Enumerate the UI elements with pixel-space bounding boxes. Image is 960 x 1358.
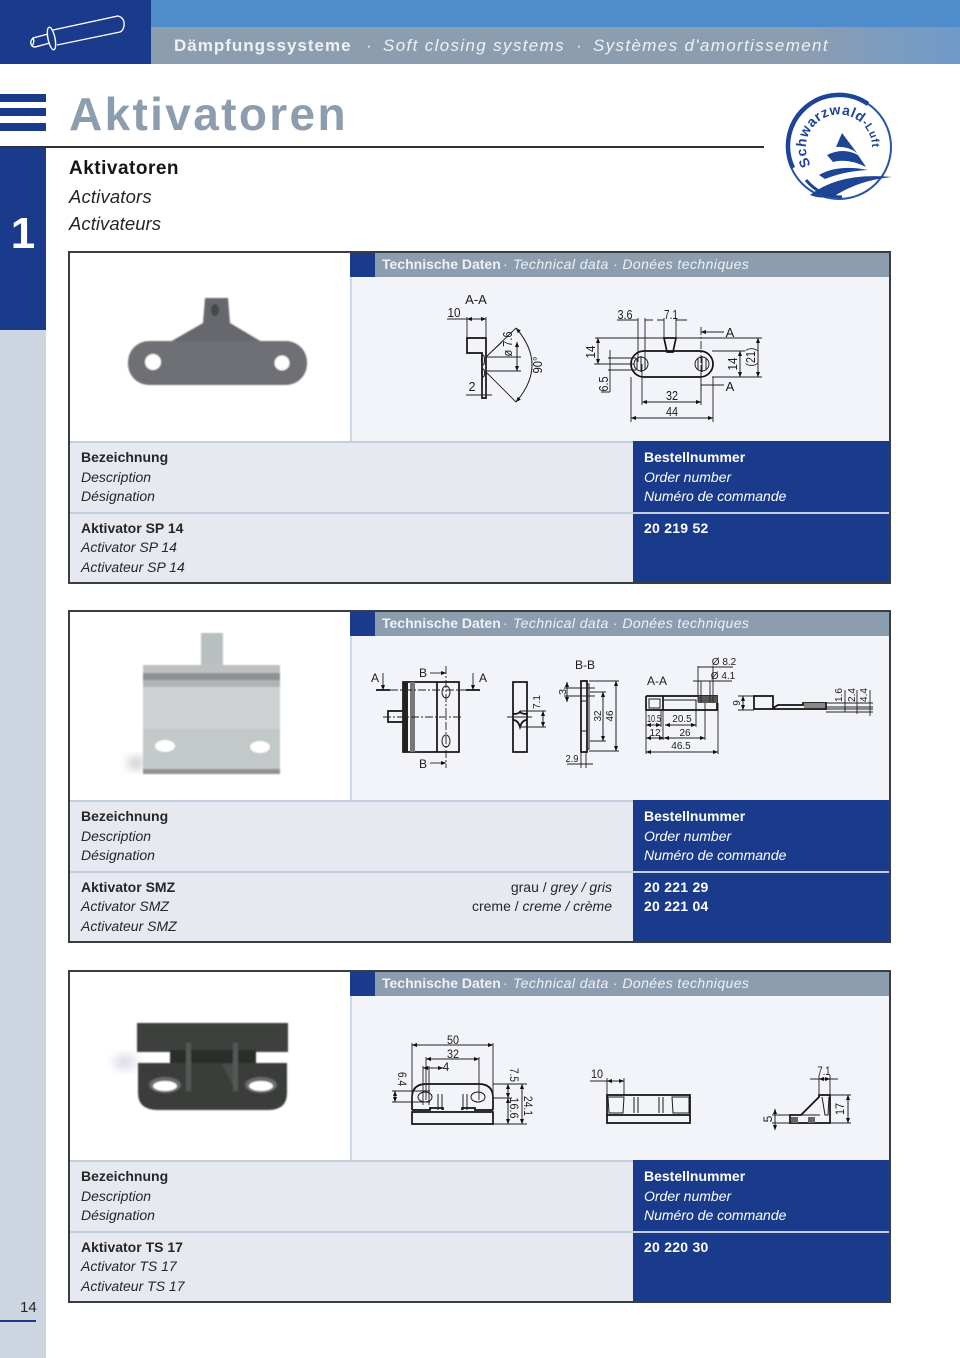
table row divider (70, 800, 889, 802)
technical drawing: SMZ: 20.5 (672, 714, 692, 725)
technical drawing: SP 14: 32 (666, 388, 678, 403)
bar accent (350, 972, 375, 996)
header title English: Soft closing systems (383, 36, 565, 55)
technical drawing: SMZ: B-B (575, 658, 595, 672)
table row divider (70, 1160, 889, 1162)
technical drawing: SMZ: 12 (649, 728, 661, 739)
order number column (633, 441, 889, 582)
header title French: Systèmes d'amortissement (593, 36, 829, 55)
logo: Schwarzwald-Luft (786, 92, 892, 200)
description header: Désignation (81, 847, 155, 863)
technical drawing: SP 14: 10 (448, 305, 460, 320)
order header (644, 449, 786, 504)
technical drawing: SMZ: 9 (732, 700, 743, 706)
order header: Numéro de commande (644, 1207, 786, 1223)
technical drawing: SMZ: 2.9 (566, 754, 579, 765)
technical drawing: SP 14: 7.1 (664, 307, 678, 322)
technical drawing: SMZ: A-A (647, 674, 667, 688)
product name: Activateur SMZ (81, 918, 177, 934)
table row divider (70, 1231, 889, 1233)
technical data label: Technische Daten (382, 975, 501, 991)
technical data label: · (503, 615, 508, 631)
product photo: SP 14 (127, 297, 308, 386)
order header: Bestellnummer (644, 449, 745, 465)
technical data bar (350, 612, 889, 636)
technical drawing: SP 14: (21) (743, 348, 758, 366)
product name: Activateur TS 17 (81, 1278, 184, 1294)
heading English: Activators (69, 186, 152, 207)
technical drawing: TS 17: 7.5 (507, 1068, 521, 1082)
technical drawing: SMZ: 7.1 (532, 695, 543, 709)
table: description and order number (70, 1160, 889, 1301)
order values: 20 221 04 (644, 898, 709, 914)
technical drawing: SP 14: 14 (583, 346, 598, 358)
technical drawing: SMZ: 4.4 (859, 688, 870, 702)
bar accent (350, 612, 375, 636)
technical drawing: SMZ: 26 (679, 728, 691, 739)
technical drawing: SMZ: A (479, 671, 487, 685)
technical drawing: TS 17: 17 (833, 1103, 847, 1115)
technical drawing: TS 17: 16.6 (507, 1098, 521, 1119)
product name: Aktivator SP 14 (81, 520, 183, 536)
table: description and order number (70, 441, 889, 582)
header separator: · (576, 36, 583, 55)
technical drawing: SMZ (350, 636, 889, 800)
table: description and order number (70, 800, 889, 941)
technical drawing: TS 17: 24.1 (521, 1096, 535, 1116)
order header (644, 1168, 786, 1223)
order column divider (633, 1231, 889, 1233)
icon: damper cylinder (30, 15, 125, 50)
product name (80, 879, 178, 934)
technical data label: Technical data · Donées techniques (513, 615, 749, 631)
technical data bar (350, 972, 889, 996)
technical drawing: SMZ: 1.6 (834, 688, 845, 702)
order value: 20 219 52 (644, 520, 709, 536)
technical data bar (350, 253, 889, 277)
technical data label: Technische Daten (382, 615, 501, 631)
table row divider (70, 441, 889, 443)
description header: Description (81, 828, 151, 844)
technical drawing: SMZ: 2.4 (847, 688, 858, 702)
technical drawing: SMZ: Ø 4.1 (711, 671, 736, 682)
order value: 20 220 30 (644, 1239, 709, 1255)
technical drawing: SMZ: B (419, 666, 427, 680)
technical drawing: SMZ: B (419, 757, 427, 771)
technical data label (382, 615, 749, 631)
technical drawing: SMZ: A (371, 671, 379, 685)
technical drawing: TS 17: 6.4 (395, 1072, 409, 1086)
technical drawing: SP 14 (350, 277, 889, 441)
order values: 20 221 29 (644, 879, 709, 895)
product name: Activator SMZ (81, 898, 169, 914)
product name: Activator SP 14 (81, 539, 177, 555)
bar accent (350, 253, 375, 277)
technical drawing: SP 14: 44 (666, 404, 678, 419)
technical drawing: SMZ: 46.5 (671, 741, 691, 752)
colour options (472, 879, 612, 914)
technical drawing: SP 14: ø 7.6 (500, 332, 515, 356)
heading French: Activateurs (69, 213, 161, 234)
header title band (151, 27, 960, 64)
technical drawing: TS 17: 50 (447, 1033, 459, 1047)
table row divider (70, 871, 889, 873)
logo: Schwarzwald-Luft: Schwarzwald-Luft (796, 106, 880, 168)
technical drawing: SP 14: 90° (530, 356, 545, 374)
description header: Désignation (81, 1207, 155, 1223)
section heading (68, 158, 179, 234)
order header: Order number (644, 1188, 731, 1204)
order header: Bestellnummer (644, 1168, 745, 1184)
page number: 14 (20, 1299, 37, 1316)
heading German: Aktivatoren (69, 158, 179, 179)
technical drawing: SP 14: A-A (465, 292, 487, 307)
description header (81, 449, 168, 504)
technical drawing: TS 17: 4 (443, 1060, 450, 1074)
main title: Aktivatoren (69, 88, 348, 140)
technical drawing: TS 17: 32 (447, 1047, 459, 1061)
header top blue band (151, 0, 960, 27)
product name: Aktivator SMZ (81, 879, 175, 895)
technical drawing: SP 14: 14 (725, 358, 740, 370)
technical drawing: SP 14: A (726, 325, 735, 340)
technical drawing: TS 17: 5 (761, 1115, 775, 1122)
product name: Activateur SP 14 (81, 559, 185, 575)
colour options: creme / creme / crème (472, 898, 612, 914)
chapter number: 1 (11, 209, 35, 258)
product name (80, 1239, 185, 1294)
sidebar lower band (0, 330, 46, 1358)
technical drawing: SMZ: 3 (558, 689, 569, 695)
description header: Bezeichnung (81, 808, 168, 824)
technical drawing: TS 17 (350, 996, 889, 1160)
header icon block (0, 0, 151, 64)
description header (81, 808, 168, 863)
order values (644, 879, 709, 914)
description header: Bezeichnung (81, 449, 168, 465)
panel: Aktivator TS 17 (68, 970, 891, 1303)
description header: Désignation (81, 488, 155, 504)
technical drawing: TS 17: 7.1 (818, 1064, 831, 1078)
order header (644, 808, 786, 863)
technical drawing: SP 14: 6.5 (596, 376, 611, 392)
technical data label: · (503, 256, 508, 272)
product name: Activator TS 17 (81, 1258, 177, 1274)
table row divider (70, 512, 889, 514)
description header: Description (81, 469, 151, 485)
technical data label (382, 256, 749, 272)
technical data label: Technical data · Donées techniques (513, 256, 749, 272)
sidebar chapter stripes (0, 94, 46, 131)
technical drawing: SMZ: 10.5 (647, 714, 661, 725)
order column divider (633, 871, 889, 873)
sidebar chapter block (0, 148, 46, 330)
page number rule (0, 1320, 36, 1322)
technical drawing: TS 17: 10 (591, 1067, 603, 1081)
colour options: grau / grey / gris (511, 879, 612, 895)
technical data label (382, 975, 749, 991)
header separator: · (366, 36, 373, 55)
header title German: Dämpfungssysteme (174, 36, 352, 55)
technical data label: Technical data · Donées techniques (513, 975, 749, 991)
technical drawing: SP 14: 2 (468, 379, 476, 394)
order header: Order number (644, 469, 731, 485)
product name: Aktivator TS 17 (81, 1239, 183, 1255)
panel: Aktivator SP 14 (68, 251, 891, 584)
order number column (633, 1160, 889, 1301)
panel: Aktivator SMZ (68, 610, 891, 943)
technical drawing: SMZ: Ø 8.2 (712, 657, 737, 668)
technical data label: Technische Daten (382, 256, 501, 272)
technical drawing: SMZ: 32 (593, 710, 604, 722)
order header: Bestellnummer (644, 808, 745, 824)
product photo: SMZ (124, 632, 281, 775)
title rule (0, 146, 764, 148)
description header: Description (81, 1188, 151, 1204)
technical drawing: SP 14: A (726, 379, 735, 394)
product name (80, 520, 185, 575)
technical drawing: SMZ: 46 (605, 710, 616, 722)
description header: Bezeichnung (81, 1168, 168, 1184)
order number column (633, 800, 889, 941)
description header (81, 1168, 168, 1223)
technical drawing: SP 14: 3.6 (618, 307, 632, 322)
order header: Order number (644, 828, 731, 844)
order column divider (633, 512, 889, 514)
technical data label: · (503, 975, 508, 991)
product photo: TS 17 (112, 1022, 290, 1112)
order header: Numéro de commande (644, 847, 786, 863)
order header: Numéro de commande (644, 488, 786, 504)
